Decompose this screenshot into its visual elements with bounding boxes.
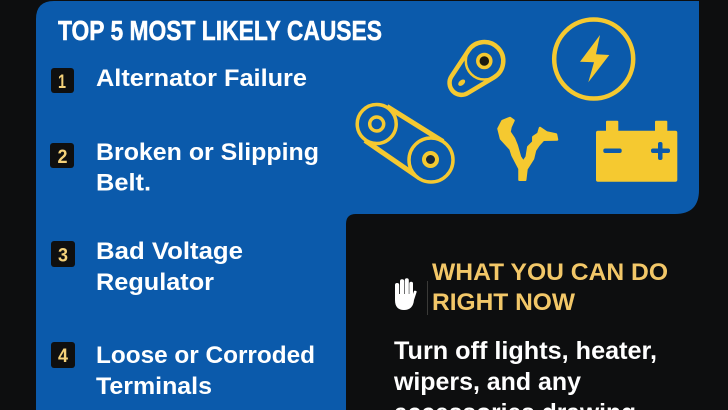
icon: raised hand bbox=[395, 278, 417, 310]
heading: top 5 causes: TOP 5 MOST LIKELY CAUSES bbox=[58, 15, 382, 46]
cause 4: Terminals bbox=[96, 373, 212, 400]
cause 1: Alternator Failure bbox=[96, 65, 307, 92]
cause 3: 3 bbox=[58, 246, 68, 266]
cause 4: 4 bbox=[58, 346, 68, 367]
cause 2: 2 bbox=[58, 147, 68, 168]
cause 3: Regulator bbox=[96, 269, 214, 296]
cause 1: 1 bbox=[58, 72, 66, 93]
cause 4 bbox=[51, 342, 315, 400]
icon: frayed wire bbox=[498, 118, 557, 180]
panel: what you can do bbox=[393, 259, 668, 410]
icon: battery bbox=[596, 121, 677, 182]
cause 2: Belt. bbox=[96, 170, 151, 196]
cause 4: Loose or Corroded bbox=[96, 342, 315, 369]
body text: turn off accessories: wipers, and any bbox=[393, 368, 581, 396]
cause 2 bbox=[50, 139, 319, 196]
cause 3 bbox=[51, 238, 243, 296]
heading: what you can do right now: RIGHT NOW bbox=[432, 289, 576, 316]
cause 3: Bad Voltage bbox=[96, 238, 243, 265]
icon: belt and pulleys bbox=[357, 104, 453, 182]
heading: what you can do right now bbox=[432, 259, 668, 316]
heading: what you can do right now: WHAT YOU CAN DO bbox=[432, 259, 668, 286]
body text: turn off accessories bbox=[393, 337, 657, 410]
cause 2: Broken or Slipping bbox=[96, 139, 319, 166]
icon: small pulley bbox=[450, 42, 503, 95]
body text: turn off accessories: Turn off lights, heater, bbox=[394, 337, 657, 365]
icon: lightning circle bbox=[554, 20, 633, 98]
